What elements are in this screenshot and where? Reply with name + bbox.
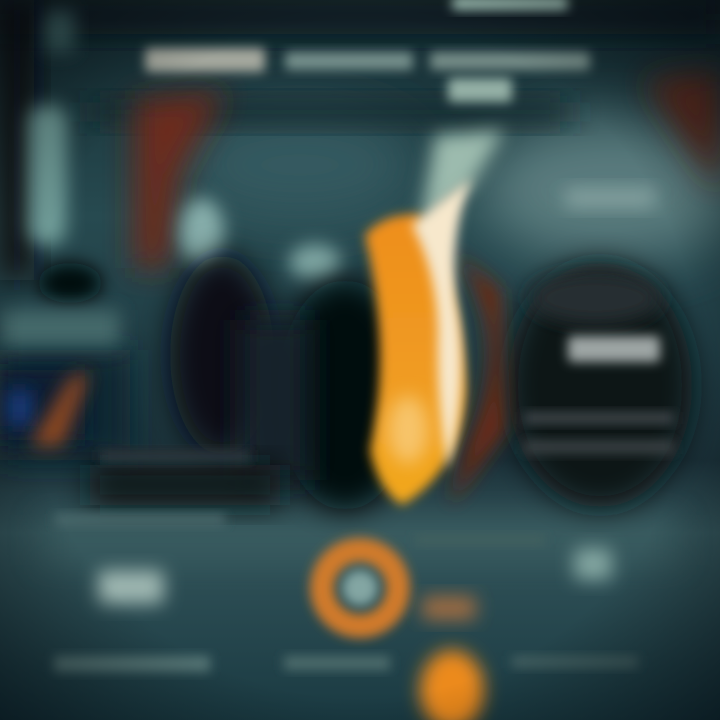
icon: flame crescent [365, 178, 505, 505]
left faint labels [55, 450, 250, 526]
title [145, 48, 590, 102]
panel: left pillar and red column [0, 10, 341, 346]
dark wheels [90, 255, 692, 510]
stat: left number [54, 570, 210, 672]
panel: top right red column [645, 70, 720, 190]
top label bar [452, 0, 568, 10]
stat: right number [512, 548, 638, 668]
orange stat text [284, 535, 545, 670]
small bar chart at left [0, 370, 90, 446]
chart label on right wheel [524, 188, 674, 454]
orange glow bottom [420, 650, 484, 720]
light beam [420, 130, 505, 225]
icon: orange ring [322, 550, 398, 626]
